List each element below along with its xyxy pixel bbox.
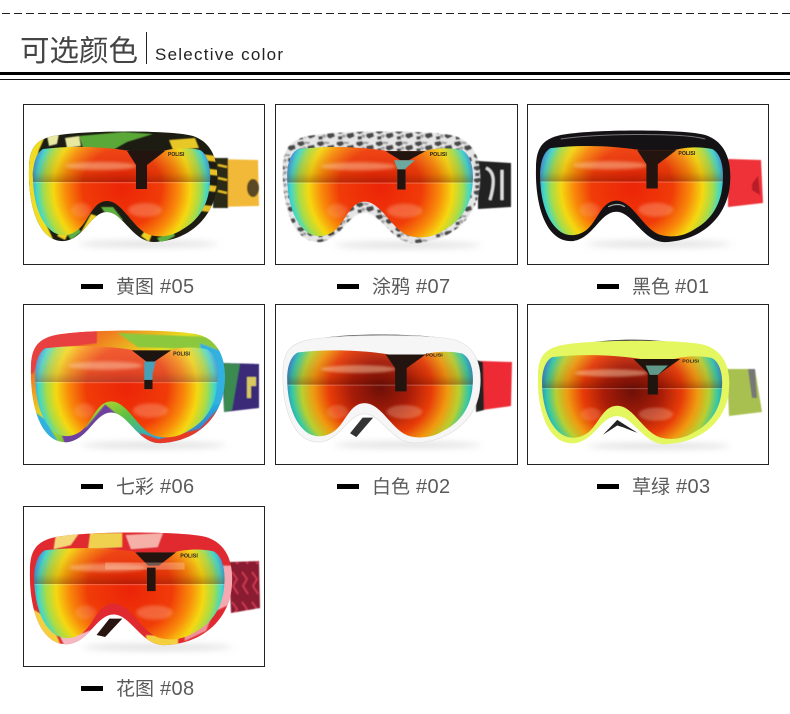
goggles — [25, 329, 231, 448]
goggles — [28, 532, 234, 650]
color label — [337, 476, 451, 498]
color label — [81, 678, 195, 700]
goggles — [282, 131, 481, 248]
color label: #08 — [160, 678, 195, 700]
icon: strap — [476, 360, 512, 412]
color label: #05 — [160, 276, 195, 298]
color label — [337, 276, 451, 298]
header — [0, 32, 790, 80]
icon: strap — [478, 161, 511, 209]
title: Chinese: 可选颜色 — [20, 35, 138, 68]
title: English: Selective color — [155, 45, 283, 64]
logo: POLISI — [173, 351, 191, 357]
panel: white #02 — [276, 304, 518, 498]
color label — [81, 476, 195, 498]
header rule — [0, 72, 790, 80]
goggles — [282, 335, 481, 448]
goggles — [537, 340, 730, 449]
icon: strap — [727, 369, 762, 416]
color label — [81, 276, 195, 298]
panel: floral #08 — [24, 506, 264, 700]
color label: #03 — [676, 476, 711, 498]
logo: POLISI — [682, 359, 700, 365]
title divider — [146, 32, 147, 64]
color label — [597, 276, 710, 298]
color label: #02 — [416, 476, 451, 498]
panel: black #01 — [528, 104, 768, 298]
color label: #06 — [160, 476, 195, 498]
color label: #01 — [675, 276, 710, 298]
color label: 涂鸦 — [372, 276, 410, 298]
logo: POLISI — [180, 554, 198, 559]
goggles — [23, 132, 219, 247]
icon: strap — [213, 158, 259, 208]
logo: POLISI — [426, 353, 443, 358]
logo: POLISI — [168, 152, 185, 158]
icon: strap — [229, 561, 260, 613]
color label — [597, 476, 711, 498]
panel: lime #03 — [528, 304, 768, 498]
icon: strap — [222, 363, 259, 412]
panel: rainbow #06 — [24, 304, 264, 498]
color label: 黑色 — [632, 276, 670, 298]
logo: POLISI — [430, 152, 447, 158]
color label: 花图 — [116, 678, 154, 700]
color label: #07 — [416, 276, 451, 298]
panel: graffiti #07 — [276, 104, 518, 298]
color label: 黄图 — [116, 276, 154, 298]
icon: strap — [728, 159, 763, 207]
goggles — [535, 130, 731, 247]
color label: 七彩 — [116, 476, 154, 498]
color label: 白色 — [372, 476, 410, 498]
logo: POLISI — [678, 151, 696, 157]
panel: yellow #05 — [23, 104, 264, 298]
color label: 草绿 — [632, 476, 670, 498]
